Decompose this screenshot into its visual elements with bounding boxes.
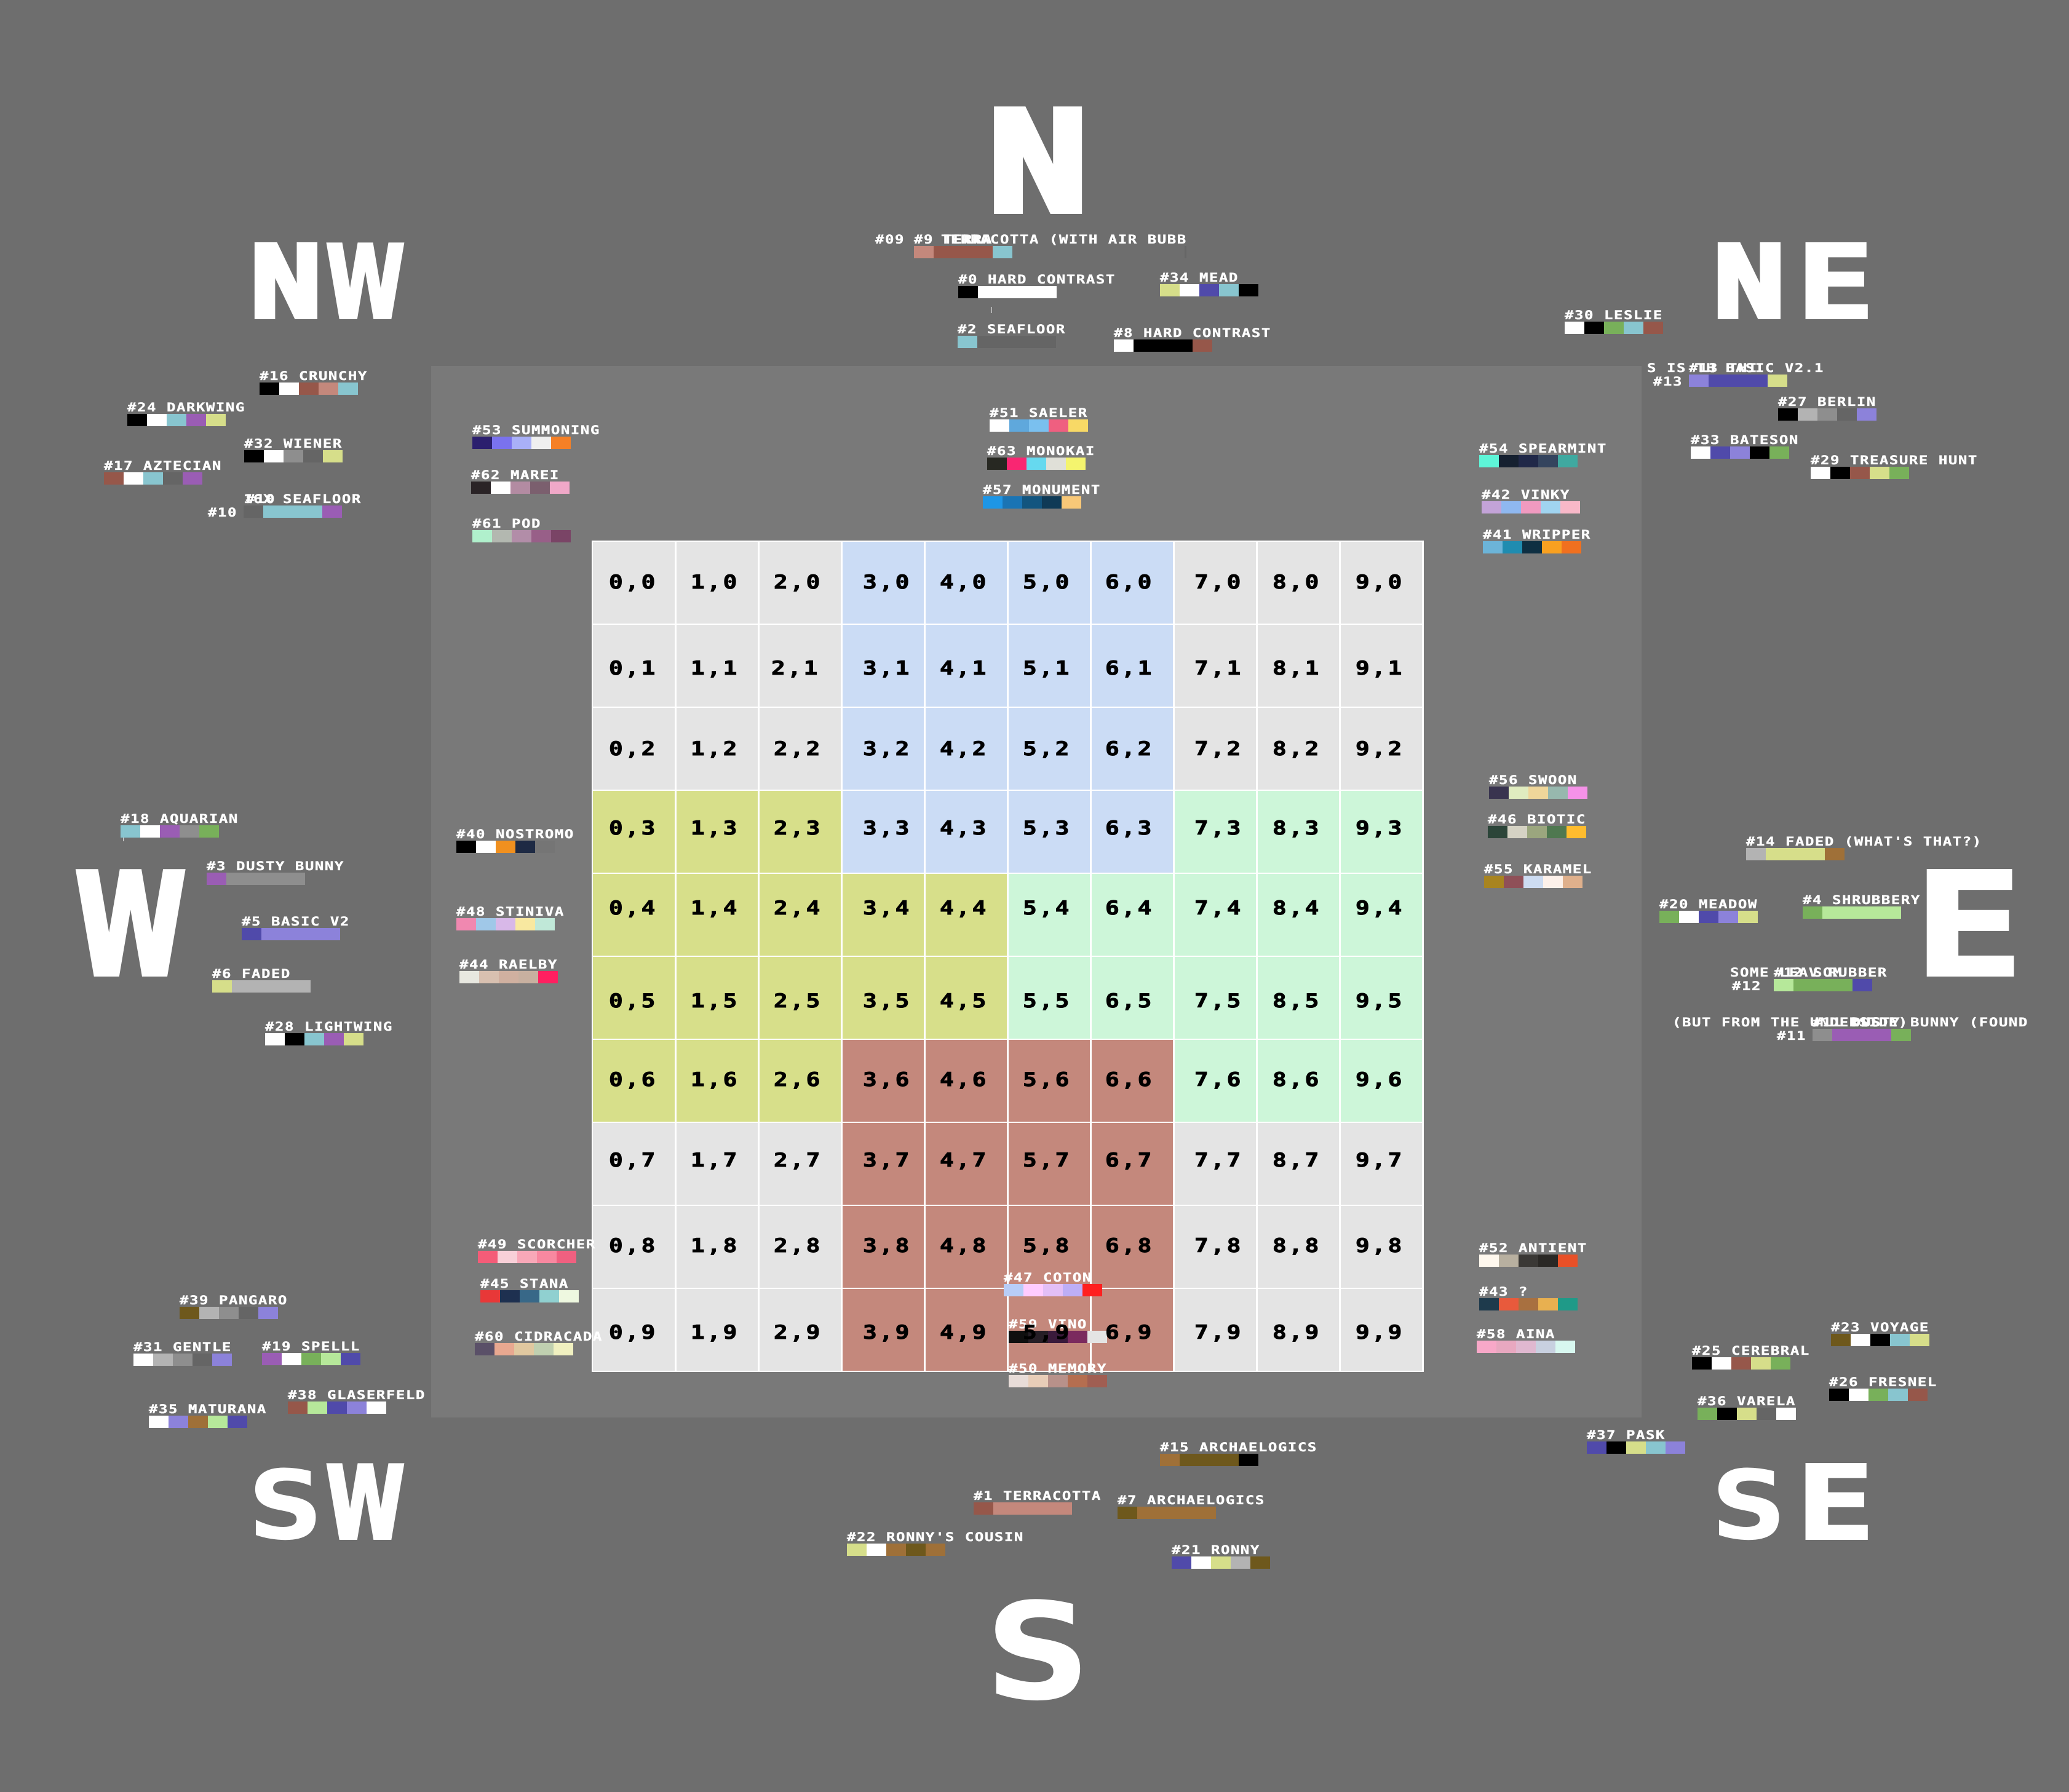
grid labels row 8: 0,8 [609,1235,657,1257]
grid labels row 7: 2,7 [774,1149,822,1172]
grid labels row 2: 0,2 [609,738,657,760]
palette #9 terracotta with overlapping labels: TERRACOTTA (WITH AIR BUBB [941,233,1187,247]
grid labels row 6: 8,6 [1273,1069,1321,1091]
grid labels row 2 [609,738,1404,760]
heading: NW: W [326,226,405,341]
palette #12 with overlapping labels [1730,966,1888,993]
palette #37 [1587,1429,1685,1454]
grid labels row 7: 5,7 [1023,1149,1071,1172]
palette #27 [1778,395,1876,421]
palette #33: #33 BATESON [1691,434,1799,447]
grid labels row 6: 7,6 [1194,1069,1243,1091]
palette #63 [987,445,1095,470]
palette #45 [480,1277,579,1302]
palette #23: #23 VOYAGE [1831,1321,1929,1334]
palette #53: #53 SUMMONING [472,424,600,437]
grid labels row 7: 1,7 [691,1149,739,1172]
heading: E: E [1912,839,2026,1012]
palette #42: #42 VINKY [1482,488,1570,502]
grid row 2 [593,708,1422,790]
palette #52: #52 ANTIENT [1479,1242,1587,1255]
palette #27: #27 BERLIN [1778,395,1876,409]
palette #38 [288,1389,426,1414]
palette #11 with overlapping labels [1672,1016,2028,1043]
palette #36: #36 VARELA [1698,1395,1796,1408]
palette #13 with overlapping labels: #13 [1653,375,1683,389]
grid labels row 1: 9,1 [1356,657,1404,680]
palette #1 [974,1489,1102,1515]
palette #32 [244,437,343,462]
palette #8: #8 HARD CONTRAST [1114,327,1271,340]
palette #10 with overlapping labels: 16X SEAFLOOR [244,493,362,506]
grid labels row 9: 5,9 [1023,1322,1071,1344]
grid labels row 1: 2,1 [771,657,820,680]
grid labels row 9: 4,9 [940,1322,988,1344]
grid labels row 7: 9,7 [1356,1149,1404,1172]
grid labels row 9: 9,9 [1356,1322,1404,1344]
palette #31: #31 GENTLE [133,1341,232,1354]
palette #20 [1659,898,1758,923]
grid labels row 3: 2,3 [774,817,822,839]
grid labels row 1: 4,1 [940,657,988,680]
palette #26 [1829,1376,1937,1401]
palette #17 [104,459,222,485]
grid row 4 [593,874,1422,956]
palette #58: #58 AINA [1477,1328,1555,1341]
grid labels row 3: 7,3 [1194,817,1243,839]
grid labels row 3: 3,3 [863,817,911,839]
palette #45: #45 STANA [480,1277,569,1291]
grid labels row 6: 1,6 [691,1069,739,1091]
palette #9 terracotta with overlapping labels [875,233,1187,258]
grid labels row 1: 3,1 [863,657,911,680]
heading: SE: S [1711,1449,1787,1561]
grid labels row 5: 8,5 [1273,990,1321,1012]
palette #56 [1489,774,1587,799]
grid row 9 [593,1289,1422,1371]
grid labels row 7: 7,7 [1194,1149,1243,1172]
grid labels row 9: 8,9 [1273,1322,1321,1344]
palette #3 [207,860,344,885]
grid labels row 5: 5,5 [1023,990,1071,1012]
palette #46: #46 BIOTIC [1488,813,1586,827]
palette #14: #14 FADED (WHAT'S THAT?) [1746,835,1982,849]
palette #39 [180,1294,288,1319]
grid labels row 1: 8,1 [1273,657,1321,680]
palette #10 with overlapping labels: #10 [208,506,237,520]
grid labels row 2: 8,2 [1273,738,1321,760]
grid labels row 0: 7,0 [1194,571,1243,593]
palette #22 [847,1531,1024,1556]
grid labels row 4: 3,4 [863,897,911,919]
heading: SW: W [326,1446,405,1562]
grid labels row 8: 6,8 [1105,1235,1154,1257]
palette #12 with overlapping labels: #12 SOM [1774,966,1843,980]
grid labels row 0: 3,0 [863,571,911,593]
grid labels row 4: 8,4 [1273,897,1321,919]
palette #63: #63 MONOKAI [987,445,1095,458]
heading: W: W [75,845,186,1007]
grid labels row 2: 6,2 [1105,738,1154,760]
grid labels row 5: 7,5 [1194,990,1243,1012]
grid labels row 8: 9,8 [1356,1235,1404,1257]
palette #23 [1831,1321,1929,1346]
grid labels row 4: 2,4 [774,897,822,919]
heading: SW [248,1446,405,1562]
grid labels row 4: 1,4 [691,897,739,919]
palette #6: #6 FADED [212,967,291,981]
palette #43: #43 ? [1479,1285,1528,1299]
grid labels row 3: 1,3 [691,817,739,839]
grid labels row 8: 3,8 [863,1235,911,1257]
palette #21: #21 RONNY [1172,1544,1260,1557]
palette #10 with overlapping labels [208,493,362,520]
palette #0 [958,273,1116,298]
palette #32: #32 WIENER [244,437,343,451]
grid labels row 3: 4,3 [940,817,988,839]
grid row 3 [593,791,1422,873]
palette #38: #38 GLASERFELD [288,1389,426,1402]
palette #9 terracotta with overlapping labels: #9 TERRA [914,233,993,247]
grid labels row 3: 6,3 [1105,817,1154,839]
grid labels row 8: 7,8 [1194,1235,1243,1257]
palette #6 [212,967,311,993]
palette #29: #29 TREASURE HUNT [1811,454,1978,467]
grid labels row 1: 1,1 [691,657,739,680]
grid labels row 8: 5,8 [1023,1235,1071,1257]
tick marks near palettes [123,246,1186,841]
grid labels row 7: 3,7 [863,1149,911,1172]
grid labels row 0 [609,571,1404,593]
palette #37: #37 PASK [1587,1429,1666,1442]
grid labels row 6: 4,6 [940,1069,988,1091]
grid labels row 5: 4,5 [940,990,988,1012]
palette #42 [1482,488,1580,513]
grid labels row 1: 0,1 [609,657,657,680]
grid labels row 0: 6,0 [1105,571,1154,593]
palette #7: #7 ARCHAELOGICS [1118,1494,1265,1507]
grid row 1 [593,625,1422,707]
heading: S: S [985,1574,1091,1731]
grid labels row 3: 5,3 [1023,817,1071,839]
heading: SE: E [1795,1442,1876,1565]
palette #49: #49 SCORCHER [478,1238,596,1251]
palette #24 [127,401,245,426]
palette #8 [1114,327,1271,352]
grid labels row 7: 4,7 [940,1149,988,1172]
palette #3: #3 DUSTY BUNNY [207,860,344,873]
palette #2 [958,323,1066,348]
grid labels row 6: 6,6 [1105,1069,1154,1091]
palette #11 with overlapping labels: #11 DUS [1813,1016,1881,1029]
palette #28 [265,1020,393,1045]
palette #26: #26 FRESNEL [1829,1376,1937,1389]
grid labels row 6: 0,6 [609,1069,657,1091]
palette #21 [1172,1544,1270,1569]
grid labels row 3: 8,3 [1273,817,1321,839]
grid labels row 5: 2,5 [774,990,822,1012]
palette #0: #0 HARD CONTRAST [958,273,1116,287]
grid labels row 0: 5,0 [1023,571,1071,593]
palette #18 [121,812,239,838]
palette #62 [471,469,570,494]
grid labels row 2: 2,2 [774,738,822,760]
palette #10 with overlapping labels: #10 [246,493,276,506]
grid labels row 2: 1,2 [691,738,739,760]
palette #5 [242,915,350,940]
grid labels row 8: 1,8 [691,1235,739,1257]
grid labels row 2: 4,2 [940,738,988,760]
grid labels row 9: 6,9 [1105,1322,1154,1344]
palette #25 [1692,1344,1810,1370]
palette #13 with overlapping labels: #13 THI [1689,362,1758,375]
grid labels row 5: 9,5 [1356,990,1404,1012]
coordinate grid [592,541,1424,1372]
palette #12 with overlapping labels: SOME LEAV RUBBER [1730,966,1888,980]
palette #34 [1160,271,1258,296]
palette #51 [990,406,1088,432]
grid labels row 4: 5,4 [1023,897,1071,919]
palette #24: #24 DARKWING [127,401,245,414]
grid labels row 0: 1,0 [691,571,739,593]
palette #55 [1484,863,1592,888]
palette #56: #56 SWOON [1489,774,1578,787]
palette #60 [475,1330,603,1355]
palette #61 [472,517,571,542]
grid labels row 1: 7,1 [1194,657,1243,680]
palette #4 [1803,894,1921,919]
grid labels row 8 [609,1235,1404,1257]
grid row 8 [593,1206,1422,1288]
palette #1: #1 TERRACOTTA [974,1489,1102,1503]
grid labels row 9: 0,9 [609,1322,657,1344]
palette #57: #57 MONUMENT [983,483,1101,497]
palette #18: #18 AQUARIAN [121,812,239,826]
grid labels row 8: 4,8 [940,1235,988,1257]
palette #34: #34 MEAD [1160,271,1239,285]
palette #47 [1004,1271,1102,1296]
palette #40: #40 NOSTROMO [456,828,574,841]
palette #11 with overlapping labels: #11 [1777,1029,1806,1043]
grid labels row 1: 5,1 [1023,657,1071,680]
palette #15 [1160,1441,1317,1466]
grid row 6 [593,1040,1422,1122]
grid row 7 [593,1123,1422,1205]
palette #43 [1479,1285,1578,1310]
grid labels row 3: 0,3 [609,817,657,839]
palette #53 [472,424,600,449]
grid labels row 7 [609,1149,1404,1172]
grid labels row 2: 7,2 [1194,738,1243,760]
palette #40 [456,828,574,853]
grid labels row 6: 3,6 [863,1069,911,1091]
palette #39: #39 PANGARO [180,1294,288,1307]
palette #50 [1009,1362,1107,1387]
grid labels row 0: 2,0 [774,571,822,593]
palette #12 with overlapping labels: #12 [1732,980,1761,993]
palette #31 [133,1341,232,1366]
palette #4: #4 SHRUBBERY [1803,894,1921,907]
grid labels row 0: 8,0 [1273,571,1321,593]
heading: NW: N [248,226,323,339]
palette #25: #25 CEREBRAL [1692,1344,1810,1358]
grid labels row 4: 4,4 [940,897,988,919]
grid labels row 1: 6,1 [1105,657,1154,680]
palette #54: #54 SPEARMINT [1479,442,1607,456]
grid labels row 4: 9,4 [1356,897,1404,919]
grid labels row 7: 6,7 [1105,1149,1154,1172]
palette #51: #51 SAELER [990,406,1088,420]
palette #55: #55 KARAMEL [1484,863,1592,876]
grid labels row 6: 2,6 [774,1069,822,1091]
grid labels row 9: 7,9 [1194,1322,1243,1344]
grid labels row 6 [609,1069,1404,1091]
palette #46 [1488,813,1586,838]
palette #7 [1118,1494,1265,1519]
palette #50: #50 MEMORY [1009,1362,1107,1376]
palette #48: #48 STINIVA [456,905,565,919]
grid labels row 5 [609,990,1404,1012]
grid labels row 4: 6,4 [1105,897,1154,919]
heading: NW [248,226,405,341]
grid labels row 6: 5,6 [1023,1069,1071,1091]
grid labels row 8: 2,8 [774,1235,822,1257]
palette #59: #59 VINO [1009,1318,1087,1331]
grid labels row 5: 3,5 [863,990,911,1012]
grid labels row 7: 0,7 [609,1149,657,1172]
palette #52 [1479,1242,1587,1267]
palette #14 [1746,835,1982,860]
palette #59 [1009,1318,1107,1343]
palette #47: #47 COTON [1004,1271,1092,1285]
grid labels row 4: 7,4 [1194,897,1243,919]
grid labels row 3: 9,3 [1356,817,1404,839]
grid labels row 3 [609,817,1404,839]
palette #44 [459,958,558,983]
palette #13 with overlapping labels: S IS TH BASIC V2.1 [1647,362,1824,375]
grid labels row 7: 8,7 [1273,1149,1321,1172]
palette #41: #41 WRIPPER [1483,528,1591,542]
grid labels row 5: 1,5 [691,990,739,1012]
palette #58 [1477,1328,1575,1353]
palette #11 with overlapping labels: (BUT FROM THE UNDERSIDE) [1672,1016,1908,1029]
grid labels row 2: 3,2 [863,738,911,760]
grid labels row 2: 5,2 [1023,738,1071,760]
grid labels row 0: 0,0 [609,571,657,593]
palette #44: #44 RAELBY [459,958,558,972]
grid labels row 9: 3,9 [863,1322,911,1344]
palette #16 [260,370,368,395]
palette #15: #15 ARCHAELOGICS [1160,1441,1317,1454]
palette #17: #17 AZTECIAN [104,459,222,473]
heading: N: N [986,83,1090,243]
palette #35 [149,1403,267,1428]
palette #22: #22 RONNY'S COUSIN [847,1531,1024,1544]
heading: NE [1712,221,1876,344]
heading: NE: E [1795,221,1876,344]
palette #13 with overlapping labels [1647,362,1824,389]
palette #9 terracotta with overlapping labels: #09 [875,233,905,247]
palette #48 [456,905,565,930]
palette #30: #30 LESLIE [1565,309,1663,322]
palette #41 [1483,528,1591,553]
grid labels row 9: 1,9 [691,1322,739,1344]
palette #19: #19 SPELLL [262,1340,360,1354]
palette #49 [478,1238,596,1263]
heading: SE [1711,1442,1876,1565]
palette #28: #28 LIGHTWING [265,1020,393,1034]
palette #35: #35 MATURANA [149,1403,267,1416]
palette #33 [1691,434,1799,459]
palette #62: #62 MAREI [471,469,560,482]
grid row 0 [593,542,1422,624]
grid labels row 0: 4,0 [940,571,988,593]
palette #54 [1479,442,1607,467]
palette #60: #60 CIDRACADA [475,1330,603,1344]
grid labels row 9: 2,9 [774,1322,822,1344]
grid labels row 9 [609,1322,1404,1344]
grid labels row 5: 6,5 [1105,990,1154,1012]
central panel [431,366,1642,1417]
palette #2: #2 SEAFLOOR [958,323,1066,336]
palette #57 [983,483,1101,509]
palette #30 [1565,309,1663,334]
grid labels row 5: 0,5 [609,990,657,1012]
palette #61: #61 POD [472,517,541,531]
grid labels row 4: 0,4 [609,897,657,919]
grid labels row 4 [609,897,1404,919]
heading: SW: S [248,1449,324,1561]
grid labels row 6: 9,6 [1356,1069,1404,1091]
grid labels row 1 [609,657,1404,680]
palette #20: #20 MEADOW [1659,898,1758,911]
palette #36 [1698,1395,1796,1420]
heading: NE: N [1712,226,1786,339]
palette #16: #16 CRUNCHY [260,370,368,383]
grid row 5 [593,957,1422,1039]
grid labels row 8: 8,8 [1273,1235,1321,1257]
palette #19 [262,1340,360,1365]
palette #5: #5 BASIC V2 [242,915,350,929]
grid labels row 2: 9,2 [1356,738,1404,760]
palette #11 with overlapping labels: DUSTY BUNNY (FOUND [1851,1016,2028,1029]
palette #29 [1811,454,1978,479]
grid labels row 0: 9,0 [1356,571,1404,593]
